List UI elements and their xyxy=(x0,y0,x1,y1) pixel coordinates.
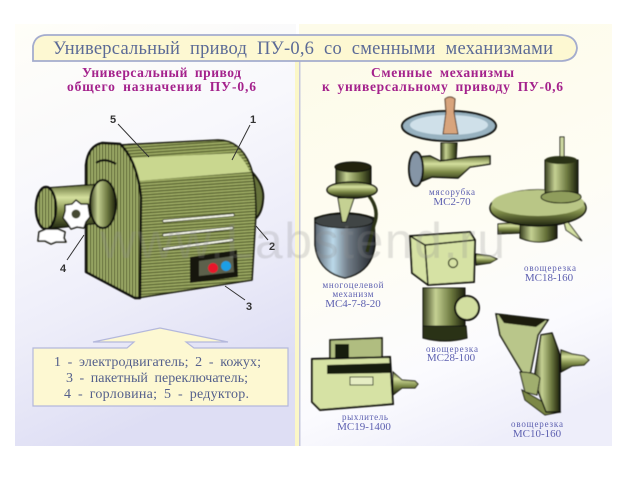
ventilation slots xyxy=(164,215,233,249)
legend arrow and box xyxy=(33,328,288,406)
switch xyxy=(190,250,238,283)
meat grinder МС2-70 xyxy=(402,97,496,186)
universal drive illustration xyxy=(36,140,263,298)
centre divider xyxy=(295,60,300,446)
label: meat grinder: мясорубка xyxy=(429,187,475,197)
right heading xyxy=(322,65,563,94)
blue button xyxy=(221,261,231,271)
legend text: 4 - горловина; 5 - редуктор. xyxy=(64,387,249,402)
end housing xyxy=(86,143,141,298)
label: vegetable cutter МС18: овощерезка xyxy=(524,263,576,273)
callout numbers and leader lines: 1 xyxy=(250,114,256,126)
title text: Универсальный привод ПУ-0,6 со сменными механизмами xyxy=(53,39,553,59)
callout numbers and leader lines: 3 xyxy=(246,301,252,313)
label: ripper: рыхлитель xyxy=(342,412,388,422)
body shell xyxy=(120,140,256,298)
label: vegetable cutter МС28: овощерезка xyxy=(426,344,478,354)
left heading xyxy=(67,65,256,94)
label: ripper xyxy=(337,412,391,433)
light top of shell xyxy=(130,153,250,181)
title banner xyxy=(33,35,577,61)
label: meat grinder xyxy=(429,187,475,208)
label: multi-purpose mechanism xyxy=(322,280,384,310)
label: vegetable cutter МС28: МС28-100 xyxy=(427,352,476,364)
tube collar xyxy=(90,180,116,228)
label: vegetable cutter МС18 xyxy=(524,263,576,284)
tube mouth xyxy=(36,187,56,229)
ripper МС19-1400 xyxy=(312,338,418,410)
upper knob xyxy=(63,200,90,229)
label: vegetable cutter МС10 xyxy=(511,419,563,440)
red button xyxy=(208,263,218,273)
right panel background xyxy=(299,24,612,446)
lower knob xyxy=(38,229,66,244)
label: vegetable cutter МС10: МС10-160 xyxy=(513,428,562,440)
callout numbers and leader lines xyxy=(60,114,275,313)
right heading: к универсальному приводу ПУ-0,6 xyxy=(322,79,563,94)
label: multi-purpose mechanism: МС4-7-8-20 xyxy=(325,298,381,310)
label: meat grinder: МС2-70 xyxy=(433,196,471,208)
label: multi-purpose mechanism: многоцелевой xyxy=(322,280,384,290)
left heading: общего назначения ПУ-0,6 xyxy=(67,79,256,94)
label: ripper: МС19-1400 xyxy=(337,421,391,433)
callout numbers and leader lines: 5 xyxy=(110,114,116,126)
rotation arrow xyxy=(96,160,116,164)
label: vegetable cutter МС18: МС18-160 xyxy=(525,272,574,284)
neck tube xyxy=(46,184,102,229)
watermark: www.Labstend.ru xyxy=(99,213,505,269)
label: multi-purpose mechanism: механизм xyxy=(332,289,374,299)
legend text: 1 - электродвигатель; 2 - кожух; xyxy=(54,355,261,370)
vegetable cutter МС10-160 xyxy=(496,314,589,415)
label: vegetable cutter МС28 xyxy=(426,344,478,364)
callout numbers and leader lines: 2 xyxy=(269,241,275,253)
left panel background xyxy=(15,24,296,446)
label: vegetable cutter МС10: овощерезка xyxy=(511,419,563,429)
right heading: Сменные механизмы xyxy=(371,65,514,80)
vegetable cutter МС18-160 xyxy=(490,137,586,242)
legend text: 3 - пакетный переключатель; xyxy=(66,371,248,386)
left heading: Универсальный привод xyxy=(82,65,241,80)
vegetable cutter МС28-100 xyxy=(410,232,497,341)
multi-purpose mechanism МС4-7-8-20 xyxy=(315,162,377,278)
rear hump xyxy=(250,170,263,220)
legend text xyxy=(54,355,261,402)
callout numbers and leader lines: 4 xyxy=(60,263,67,275)
